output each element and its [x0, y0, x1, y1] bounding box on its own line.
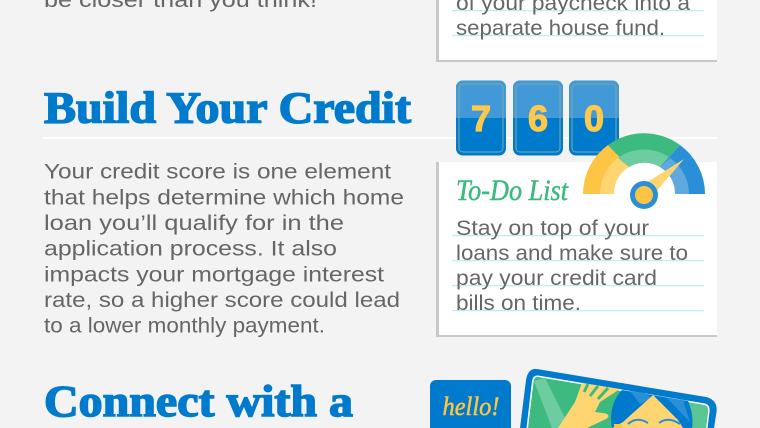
heading: To-Do List: To-Do List — [456, 174, 569, 207]
hair — [611, 390, 692, 428]
icon: flip score counter 760: 0 — [584, 98, 604, 139]
text: to-do instructions: Stay on top of your — [456, 216, 649, 240]
icon: flip score counter 760 — [456, 80, 619, 156]
text: credit score explanation: loan you’ll qualify for in the — [44, 211, 344, 235]
text: credit score explanation: application process. It also — [44, 236, 337, 260]
text: to-do instructions: loans and make sure to — [456, 241, 688, 265]
text: credit score explanation: rate, so a higher score could lead — [44, 288, 400, 312]
text: credit score explanation: impacts your mortgage interest — [44, 262, 384, 286]
text: credit score explanation: Your credit score is one element — [44, 160, 391, 184]
icon: video call illustration — [520, 369, 717, 428]
frame — [520, 369, 717, 428]
icon: credit gauge — [583, 133, 705, 209]
panel: savings to-do card: separate house fund. — [456, 16, 665, 40]
heading: Build Your Credit: Build Your Credit — [44, 84, 411, 132]
panel: credit to-do card — [436, 162, 717, 337]
eyebrows — [628, 420, 648, 424]
text: credit score explanation: that helps determine which home — [44, 186, 404, 210]
text: credit score explanation: to a lower monthly payment. — [44, 314, 325, 338]
icon: hello speech box: hello! — [442, 392, 500, 421]
icon: flip score counter 760: 7 — [471, 98, 491, 139]
icon: hello speech box — [430, 380, 511, 428]
text: to-do instructions: pay your credit card — [456, 266, 657, 290]
light stripe — [534, 378, 565, 428]
panel: savings to-do card — [436, 0, 717, 62]
green background — [528, 377, 708, 428]
text: to-do instructions — [456, 216, 688, 315]
icon: flip score counter 760: 6 — [528, 98, 548, 139]
waving hand — [558, 383, 620, 428]
text: credit score explanation — [44, 160, 404, 338]
face — [612, 395, 683, 428]
heading: Connect with a: Connect with a — [44, 377, 353, 426]
text: to-do instructions: bills on time. — [456, 291, 581, 315]
